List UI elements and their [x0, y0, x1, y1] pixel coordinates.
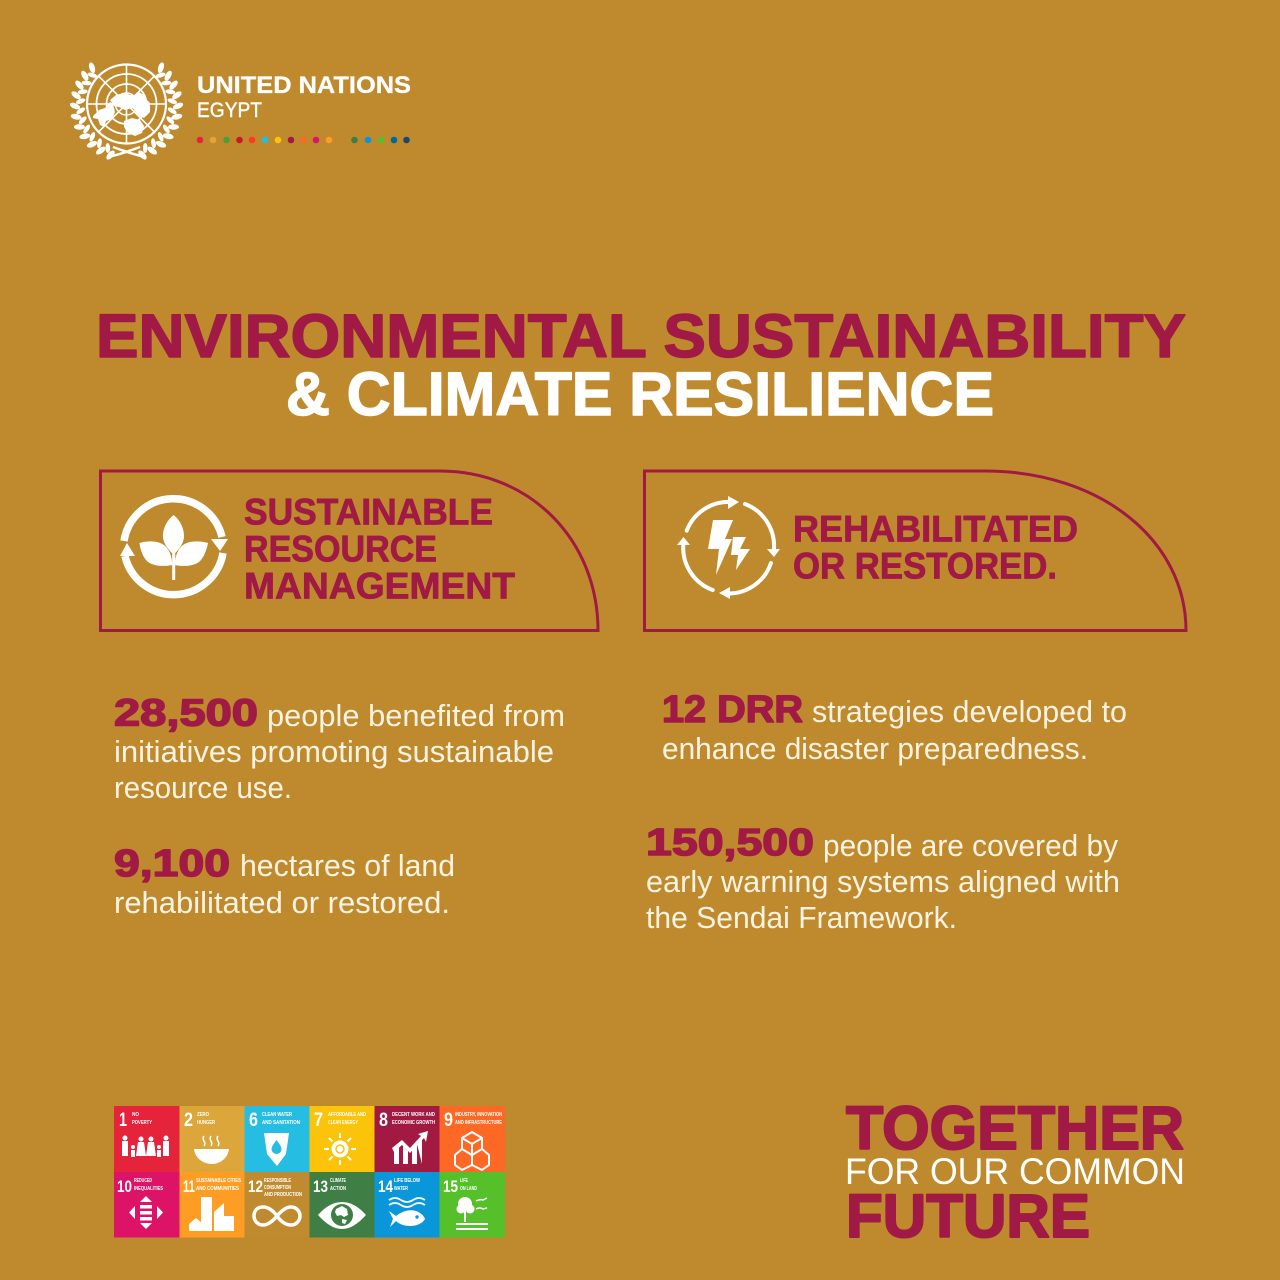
- text block: 150,500 people: 150,500: [646, 822, 814, 864]
- header: UN Egypt logo: [69, 62, 411, 161]
- SDG colour dots: [197, 137, 410, 143]
- panel heading: REHABILITATED: [793, 508, 1078, 550]
- SDG tile 6: CLEAN WATER: [262, 1112, 292, 1118]
- logo text: United Nations: UNITED NATIONS: [197, 72, 411, 99]
- text block: 9,100 hectares: rehabilitated or restored.: [114, 885, 450, 920]
- SDG tile 13: CLIMATE: [330, 1178, 346, 1184]
- slogan: together for our common future: TOGETHER: [846, 1094, 1184, 1162]
- SDG tile 1: POVERTY: [132, 1120, 152, 1126]
- SDG tile 14: LIFE BELOW: [394, 1178, 421, 1184]
- text block: 12 DRR strategies: 12 DRR: [662, 689, 803, 731]
- text block: 12 DRR strategies: strategies developed to: [812, 694, 1127, 729]
- SDG tile 12: RESPONSIBLE: [264, 1178, 291, 1184]
- text block: 9,100 hectares: [114, 843, 455, 920]
- SDG tile 6: 6: [249, 1110, 258, 1131]
- SDG tile 8: [374, 1106, 440, 1172]
- SDG tile 14: 14: [378, 1177, 393, 1196]
- text block: 12 DRR strategies: [662, 689, 1127, 766]
- panel: sustainable resource management: [100, 471, 598, 630]
- SDG tile 7: [310, 1106, 374, 1172]
- text block: 28,500 people: [114, 692, 565, 805]
- SDG tile 10: 10: [117, 1177, 132, 1196]
- SDG tile 9: [440, 1106, 505, 1172]
- SDG tile 13: [310, 1172, 374, 1238]
- text block: 28,500 people: initiatives promoting sustainable: [114, 734, 554, 769]
- text block: 28,500 people: 28,500: [114, 692, 258, 734]
- text block: 12 DRR strategies: enhance disaster preparedness.: [662, 731, 1088, 766]
- SDG tile 10: INEQUALITIES: [134, 1186, 163, 1192]
- SDG tile 12: [244, 1172, 310, 1238]
- SDG tile 11: SUSTAINABLE CITIES: [196, 1178, 241, 1184]
- SDG tile 8: 8: [379, 1110, 388, 1131]
- icon: UN emblem: [69, 62, 184, 161]
- SDG tile 12: 12: [248, 1177, 263, 1196]
- icon: leaf in recycling circle: [120, 499, 228, 595]
- SDG tile 15: [440, 1172, 505, 1238]
- SDG tile 12: AND PRODUCTION: [264, 1192, 302, 1198]
- SDG tile 10: REDUCED: [134, 1178, 152, 1184]
- text block: 150,500 people: early warning systems aligned with: [646, 864, 1120, 899]
- SDG tile 11: 11: [183, 1177, 195, 1196]
- SDG tile 10: [114, 1172, 180, 1238]
- panel heading: SUSTAINABLE: [244, 492, 493, 532]
- SDG tile 15: ON LAND: [460, 1186, 477, 1192]
- SDG icon grid: [114, 1106, 505, 1238]
- panel heading: RESOURCE: [244, 528, 437, 570]
- text block: 28,500 people: resource use.: [114, 770, 292, 805]
- SDG tile 11: AND COMMUNITIES: [196, 1186, 239, 1192]
- SDG tile 9: 9: [444, 1110, 453, 1131]
- text block: 28,500 people: people benefited from: [267, 698, 565, 733]
- SDG tile 8: DECENT WORK AND: [392, 1112, 435, 1118]
- SDG tile 2: ZERO: [197, 1112, 209, 1118]
- SDG tile 9: AND INFRASTRUCTURE: [455, 1120, 502, 1126]
- SDG tile 2: [180, 1106, 244, 1172]
- SDG tile 15: 15: [443, 1177, 458, 1196]
- text block: 9,100 hectares: 9,100: [114, 843, 230, 885]
- SDG tile 11: [180, 1172, 244, 1238]
- SDG tile 9: INDUSTRY, INNOVATION: [455, 1112, 502, 1118]
- SDG tile 8: ECONOMIC GROWTH: [392, 1120, 435, 1126]
- slogan: together for our common future: FUTURE: [846, 1182, 1090, 1250]
- SDG tile 13: ACTION: [330, 1186, 346, 1192]
- text block: 150,500 people: people are covered by: [823, 828, 1118, 863]
- SDG tile 1: [114, 1106, 180, 1172]
- SDG tile 12: CONSUMPTION: [264, 1185, 291, 1191]
- SDG tile 14: WATER: [394, 1186, 408, 1192]
- title: & CLIMATE RESILIENCE: [286, 360, 994, 428]
- SDG tile 1: 1: [119, 1110, 127, 1131]
- slogan: together for our common future: [845, 1094, 1185, 1250]
- panel heading: OR RESTORED.: [793, 546, 1057, 586]
- logo text: Egypt: EGYPT: [197, 99, 262, 122]
- slogan: together for our common future: FOR OUR COMMON: [845, 1151, 1185, 1192]
- title: ENVIRONMENTAL SUSTAINABILITY: [96, 302, 1186, 370]
- icon: lightning bolts in recycling circle: [677, 496, 780, 599]
- panel: rehabilitated or restored: [644, 471, 1186, 630]
- text block: 9,100 hectares: hectares of land: [240, 848, 455, 883]
- SDG tile 7: AFFORDABLE AND: [328, 1112, 366, 1118]
- SDG tile 13: 13: [313, 1177, 328, 1196]
- panel heading: [793, 508, 1078, 586]
- text block: 150,500 people: [646, 822, 1120, 935]
- SDG tile 2: HUNGER: [197, 1120, 215, 1126]
- SDG tile 15: LIFE: [460, 1178, 468, 1184]
- SDG tile 7: CLEAN ENERGY: [328, 1120, 358, 1126]
- SDG tile 14: [374, 1172, 440, 1238]
- title: [96, 302, 1186, 428]
- panel heading: [244, 492, 515, 606]
- SDG tile 2: 2: [184, 1110, 193, 1131]
- SDG tile 6: [244, 1106, 310, 1172]
- panel heading: MANAGEMENT: [244, 566, 515, 606]
- SDG tile 7: 7: [314, 1110, 323, 1131]
- text block: 150,500 people: the Sendai Framework.: [646, 900, 957, 935]
- SDG tile 6: AND SANITATION: [262, 1120, 300, 1126]
- SDG tile 1: NO: [132, 1112, 139, 1118]
